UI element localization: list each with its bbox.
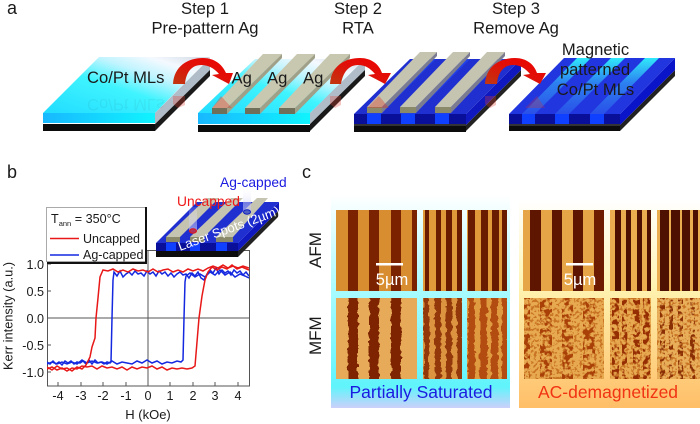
y axis tick labels: 1.0: [26, 258, 44, 272]
y axis tick labels: 0.5: [26, 285, 44, 299]
legend: annealing temperature: T: [51, 212, 59, 226]
label: Ag: Ag: [232, 68, 252, 88]
label: Co/Pt MLs: Co/Pt MLs: [557, 80, 634, 99]
x axis tick labels: -2: [97, 389, 109, 403]
label: Ag-capped: Ag-capped: [220, 175, 287, 190]
Ag bar 2: [400, 52, 470, 113]
label: uncapped: Uncapped: [177, 194, 240, 209]
label: AFM: AFM: [306, 232, 325, 268]
y axis tick labels: -0.5: [22, 339, 44, 353]
scale bar: right: [564, 263, 596, 289]
plot frame and axes: [47, 250, 250, 386]
heading: pre-pattern Ag: Pre-pattern Ag: [151, 18, 259, 38]
y axis tick labels: [22, 258, 44, 380]
inset device with laser spots: [156, 175, 287, 257]
Ag bar 3: [435, 52, 505, 113]
film 3: after RTA: [354, 52, 521, 132]
background: AC-demagnetized: [519, 200, 700, 408]
caption: AC-demagnetized: AC-demagnetized: [538, 382, 678, 402]
label: Ag: Ag: [267, 68, 287, 88]
laser beam: Ag-capped: [243, 188, 251, 212]
red hysteresis curve: uncapped: [47, 265, 249, 371]
AFM images: partially saturated: [336, 210, 507, 291]
legend: annealing temperature: = 350°C: [71, 212, 121, 226]
arrow: step 2: [330, 58, 391, 108]
panel label c: c: [302, 162, 311, 182]
legend: uncapped line: [50, 238, 79, 240]
blue hysteresis curve: Ag-capped: [47, 268, 249, 365]
x axis tick labels: 3: [211, 389, 219, 403]
x axis tick labels: -1: [120, 389, 132, 403]
scale bar: left: 5µm: [376, 271, 408, 289]
panel label b: b: [7, 162, 17, 182]
x axis tick labels: -3: [75, 389, 87, 403]
x axis tick labels: [52, 389, 242, 403]
panel a: process steps: [7, 0, 675, 132]
legend: [46, 207, 146, 263]
legend: uncapped text: Uncapped: [83, 232, 140, 246]
laser spot: Ag-capped: [244, 210, 250, 214]
label: patterned: patterned: [560, 60, 630, 79]
x axis title: H (kOe): [125, 407, 171, 422]
y axis tick labels: -1.0: [22, 366, 44, 380]
label: Co/Pt MLs: Co/Pt MLs: [87, 68, 164, 87]
panel c: microscopy: [302, 162, 700, 408]
label: Ag: Ag: [303, 68, 323, 88]
heading: remove Ag: Remove Ag: [473, 18, 559, 38]
faint reflection of label: Co/Pt MLs: [87, 95, 164, 114]
legend: Ag-capped text: Ag-capped: [83, 248, 144, 262]
x axis tick labels: 1: [166, 389, 174, 403]
laser beam: uncapped: [189, 207, 197, 231]
panel b: Kerr hysteresis: [0, 162, 287, 422]
Ag bar 1: [367, 52, 437, 113]
label: Magnetic: Magnetic: [562, 40, 629, 59]
film 2: Ag pre-patterned: [198, 54, 365, 132]
x axis tick labels: 0: [144, 389, 152, 403]
arrow: step 3: [485, 58, 546, 108]
caption: partially saturated: Partially Saturated: [350, 382, 492, 402]
x axis tick labels: -4: [52, 389, 64, 403]
label: MFM: MFM: [306, 316, 325, 355]
y axis title: Kerr intensity (a.u.): [0, 262, 15, 370]
MFM images: partially saturated: [336, 298, 507, 379]
film 1: Co/Pt MLs: [43, 57, 210, 131]
Ag bar 1: [212, 54, 282, 114]
background: partially saturated: [331, 195, 510, 408]
heading: RTA: RTA: [342, 18, 375, 38]
Ag bar 3: [279, 54, 350, 114]
legend: annealing temperature: ann: [59, 219, 71, 228]
scale bar: right: 5µm: [564, 271, 596, 289]
x axis tick labels: 2: [189, 389, 197, 403]
film 4: magnetic patterned: [509, 40, 675, 131]
MFM images: AC-demagnetized: [524, 298, 700, 379]
AFM images: AC-demagnetized: [523, 210, 700, 291]
x axis tick labels: 4: [234, 389, 242, 403]
Ag bar 2: [245, 54, 315, 114]
label: laser spots: Laser Spots (2µm): [176, 203, 282, 254]
scale bar: left: [376, 263, 408, 289]
arrow: step 1: [173, 58, 233, 108]
legend: Ag-capped line: [50, 254, 79, 256]
laser spot: uncapped: [190, 229, 196, 233]
y axis tick labels: 0.0: [26, 312, 44, 326]
